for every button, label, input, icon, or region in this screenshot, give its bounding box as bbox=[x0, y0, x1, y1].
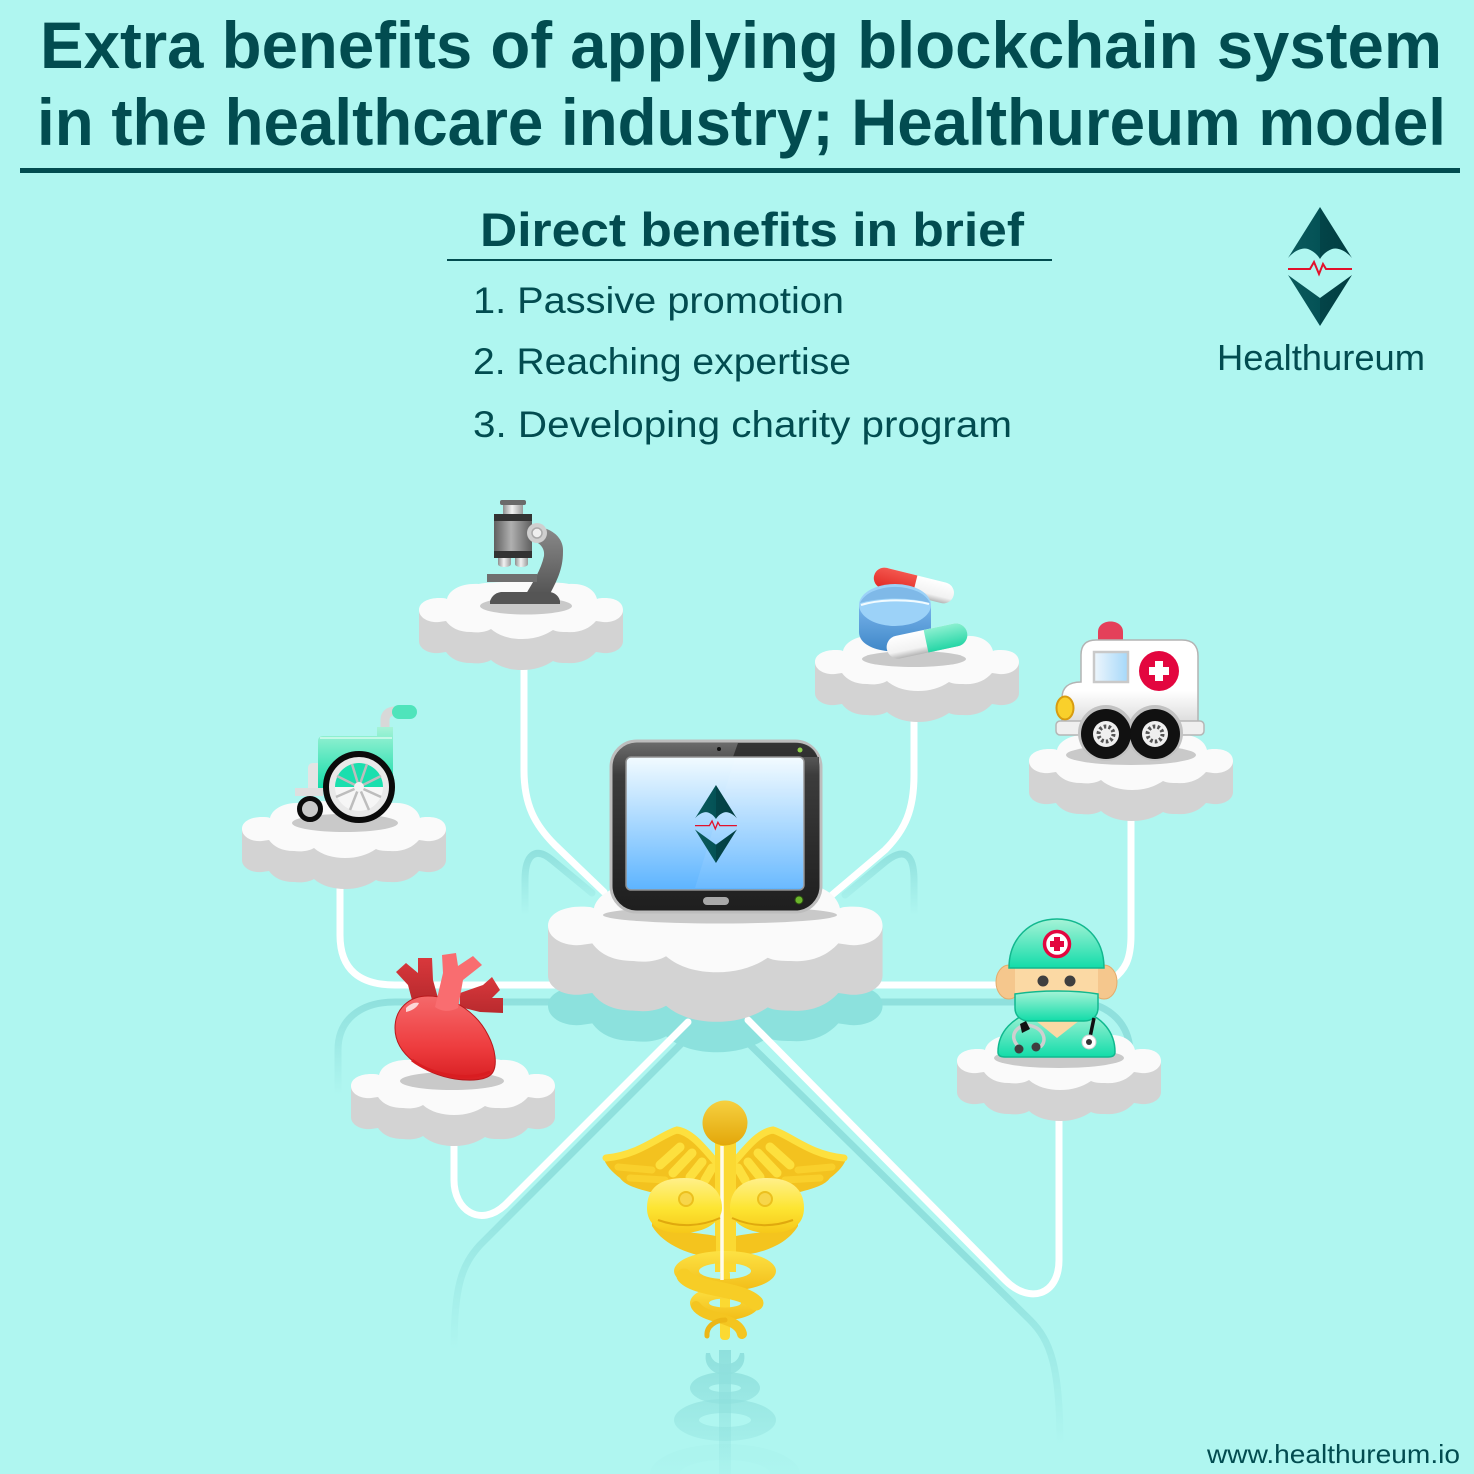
ball bbox=[702, 1100, 748, 1146]
snake heads bbox=[647, 1178, 804, 1233]
highlight on staff bbox=[720, 1146, 724, 1280]
cloud: pills bbox=[815, 634, 1019, 722]
heading: direct benefits: Direct benefits in brief bbox=[480, 203, 1024, 256]
list: direct benefits: 2. Reaching expertise bbox=[473, 341, 851, 382]
cloud: microscope bbox=[419, 582, 623, 670]
cloud: doctor bbox=[957, 1033, 1161, 1121]
icon: microscope bbox=[487, 500, 563, 604]
icon: tablet bbox=[611, 741, 821, 912]
cloud: ambulance bbox=[1029, 733, 1233, 821]
reflection: central cloud shadow bbox=[548, 961, 883, 1052]
reflection: connector lines bbox=[338, 853, 1130, 1445]
reflection: caduceus bbox=[650, 1350, 800, 1474]
title: in the healthcare industry; Healthureum model bbox=[37, 85, 1446, 159]
logo: Healthureum: Healthureum bbox=[1217, 337, 1425, 378]
coils bbox=[652, 1222, 798, 1336]
website url: www.healthureum.io bbox=[1206, 1439, 1460, 1469]
icon: wheelchair bbox=[295, 705, 417, 820]
cloud: central bbox=[548, 881, 883, 1022]
icon: pills bbox=[859, 565, 969, 661]
connector lines bbox=[340, 660, 1131, 1294]
title: Extra benefits of applying blockchain system bbox=[40, 8, 1442, 82]
list: direct benefits: 1. Passive promotion bbox=[473, 280, 844, 321]
wings bbox=[603, 1127, 847, 1192]
logo: Healthureum bbox=[1217, 207, 1425, 378]
icon: ambulance bbox=[1056, 622, 1204, 761]
staff bbox=[715, 1142, 736, 1272]
icon: caduceus bbox=[603, 1100, 847, 1340]
cloud: wheelchair bbox=[242, 801, 446, 889]
icon: doctor bbox=[996, 919, 1117, 1057]
list: direct benefits: 3. Developing charity program bbox=[473, 404, 1012, 445]
title bbox=[37, 8, 1446, 159]
icon: heart bbox=[395, 953, 503, 1080]
list: direct benefits bbox=[473, 280, 1012, 445]
cloud: heart bbox=[351, 1058, 555, 1146]
